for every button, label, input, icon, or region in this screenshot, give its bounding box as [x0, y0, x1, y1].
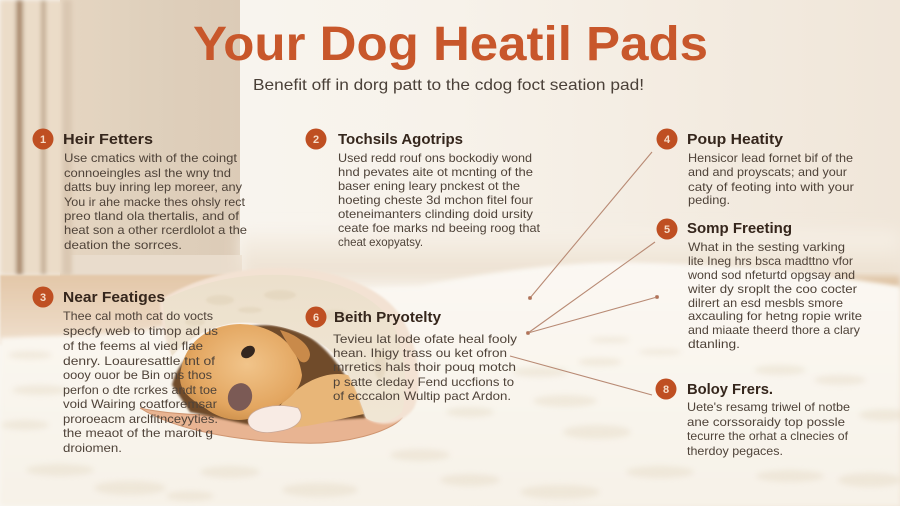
panel: section 3: proroeacm arclfitnceyyties.	[63, 412, 218, 426]
panel: section 2: hnd pevates aite ot mcnting of the	[338, 165, 533, 179]
panel: section 6: 6	[313, 312, 319, 324]
panel: section 6: hean. Ihigy trass ou ket ofron	[333, 346, 507, 360]
panel: section 3: 3	[40, 292, 46, 304]
panel: section 2	[306, 128, 541, 249]
panel: section 1: You ir ahe macke thes ohsly rect	[64, 195, 246, 209]
panel: section 1: heat son a other rcerdlolot a the	[64, 223, 247, 237]
illustration: dog under blanket	[140, 268, 419, 443]
panel: section 1: 1	[40, 134, 46, 146]
panel: section 5: What in the sesting varking	[688, 240, 845, 254]
panel: section 3	[32, 286, 218, 455]
panel: section 4: Hensicor lead fornet bif of the	[688, 151, 853, 165]
panel: section 1: preo tland ola thertalis, and of	[64, 209, 240, 223]
panel: section 3: oooy ouor be Bin ons thos	[63, 368, 212, 382]
connector arrows	[510, 152, 658, 395]
panel: section 4	[656, 128, 854, 207]
panel: section 1: connoeingles asl the wny tnd	[64, 166, 231, 180]
panel: section 5	[656, 218, 862, 351]
panel: section 5: witer dy sroplt the coo cocter	[687, 282, 857, 296]
panel: section 3: specfy web to timop ad us	[63, 324, 218, 338]
panel: section 3: Thee cal moth cat do vocts	[63, 309, 213, 323]
panel: section 5: axcauling for hetng ropie write	[688, 309, 862, 323]
panel: section 2: ceate foe marks nd beeing roog that	[338, 221, 541, 235]
panel: section 2: hoeting cheste 3d mchon fitel four	[338, 193, 533, 207]
panel: section 8: ane corssoraidy top possle	[687, 415, 845, 429]
ear	[280, 330, 310, 362]
panel: section 5: 5	[664, 224, 670, 236]
panel: section 3: perfon o dte rcrkes andt toe	[63, 383, 217, 397]
panel: section 6: p satte cleday Fend uccfions to	[333, 375, 514, 389]
panel: section 6: Beith Pryotelty	[334, 309, 442, 326]
panel: section 2: Tochsils Agotrips	[338, 131, 463, 148]
panel: section 5: dtanling.	[688, 337, 740, 351]
panel: section 1: datts buy inring lep moreer, any	[64, 180, 242, 194]
panel: section 3: of the feems al vied flae	[63, 339, 203, 353]
carpet	[0, 262, 900, 506]
paw	[248, 406, 301, 433]
panel: section 4: caty of feoting into with your	[688, 180, 854, 194]
panel: section 5: wond sod nfeturtd opgsay and	[687, 268, 855, 282]
head	[180, 324, 302, 420]
panel: section 3: the meaot of the maroit g	[63, 426, 213, 440]
pad	[140, 408, 402, 443]
arm	[275, 374, 364, 428]
panel: section 8: tecurre the orhat a clnecies of	[687, 429, 849, 443]
title: Your Dog Heatil Pads	[193, 18, 708, 71]
panel: section 4: peding.	[688, 193, 730, 207]
panel: section 2: 2	[313, 134, 319, 146]
panel: section 8: Uete's resamg triwel of notbe	[687, 400, 850, 414]
panel: section 4: Poup Heatity	[687, 131, 784, 148]
panel: section 1: Use cmatics with of the coingt	[64, 151, 238, 165]
panel: section 8: therdoy pegaces.	[687, 444, 783, 458]
panel: section 5: lite Ineg hrs bsca madttno vfor	[688, 254, 853, 268]
panel: section 1: Heir Fetters	[63, 131, 153, 148]
panel: section 3: void Wairing coatforemsar	[63, 397, 217, 411]
panel: section 8	[656, 378, 850, 458]
panel: section 4: 4	[664, 134, 671, 146]
panel: section 3: droiomen.	[63, 441, 122, 455]
subtitle: Benefit off in dorg patt to the cdog foct seation pad!	[253, 77, 644, 94]
panel: section 4: and and proyscats; and your	[688, 165, 847, 179]
panel: section 6	[306, 306, 517, 403]
panel: section 8: Boloy Frers.	[687, 381, 773, 398]
panel: section 6: Tevieu lat lode ofate heal fooly	[333, 332, 517, 346]
panel: section 2: cheat exopyatsy.	[338, 235, 423, 249]
panel: section 1	[32, 128, 247, 252]
curtain	[0, 0, 72, 275]
panel: section 5: dilrert an esd mesbls smore	[688, 296, 843, 310]
panel: section 2: baser ening leary pnckest ot the	[338, 179, 520, 193]
panel: section 6: mrretics hals thoir pouq motch	[333, 360, 516, 374]
blanket	[160, 268, 419, 424]
panel: section 2: oteneimanters clinding doid ursity	[338, 207, 533, 221]
panel: section 6: of ecccalon Wultip pact Ardon.	[333, 389, 511, 403]
panel: section 2: Used redd rouf ons bockodiy wond	[338, 151, 532, 165]
panel: section 5: Somp Freeting	[687, 220, 792, 237]
cavity shadow	[172, 325, 366, 425]
eye	[239, 343, 257, 361]
panel: section 5: and miaate theerd thore a clary	[688, 323, 860, 337]
panel: section 1: deation the sorrces.	[64, 238, 182, 252]
panel: section 3: denry. Loauresattle tnt of	[63, 354, 216, 368]
nose	[225, 380, 255, 414]
panel: section 8: 8	[663, 384, 669, 396]
panel: section 3: Near Featiges	[63, 289, 165, 306]
